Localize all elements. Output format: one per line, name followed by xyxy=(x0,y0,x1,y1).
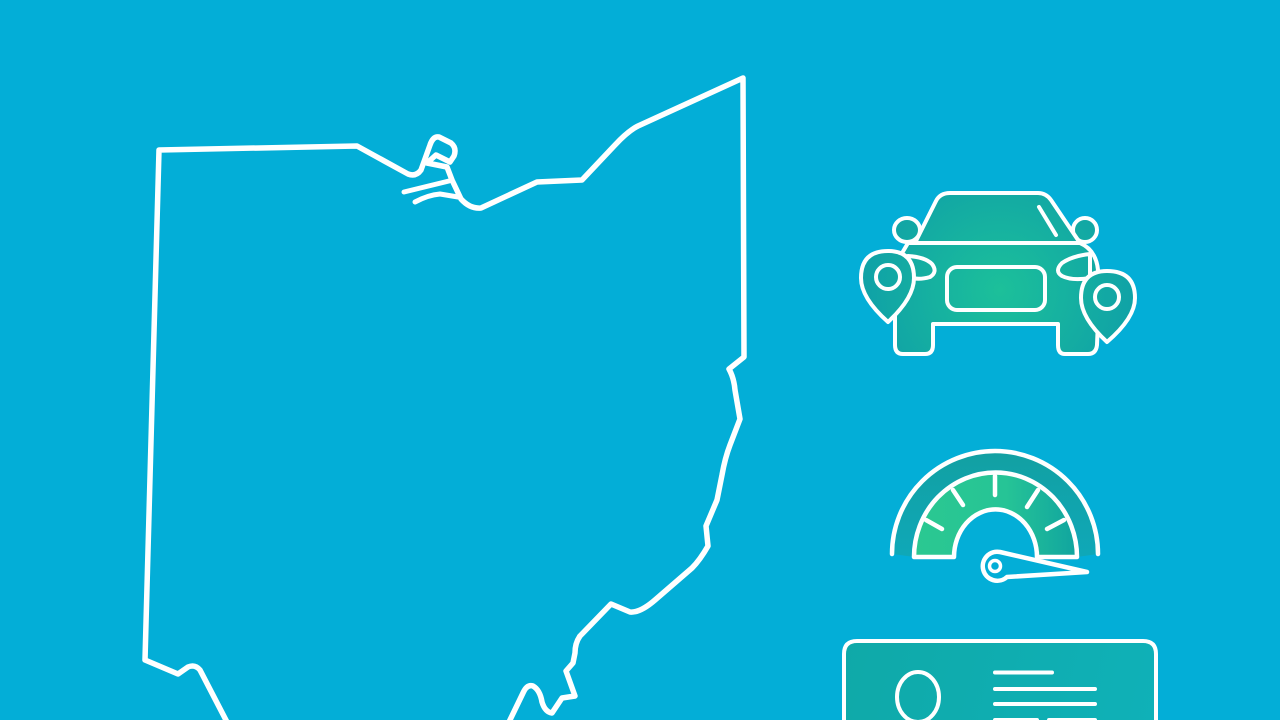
dial xyxy=(914,472,1077,557)
left mirror xyxy=(894,218,920,242)
icon: ID card xyxy=(844,641,1156,720)
ticks xyxy=(926,476,1064,529)
windshield xyxy=(915,193,1080,243)
needle xyxy=(983,552,1087,581)
photo oval xyxy=(897,672,939,720)
right headlight xyxy=(1058,254,1090,279)
outer band xyxy=(892,451,1098,557)
icon: speedometer gauge xyxy=(892,451,1098,581)
outer arc xyxy=(892,451,1098,554)
car body xyxy=(895,243,1098,354)
wiper highlight xyxy=(1039,207,1056,235)
card panel xyxy=(844,641,1156,720)
map: Ohio outline xyxy=(145,78,744,720)
icon: car with location pins xyxy=(861,193,1135,354)
left pin xyxy=(861,251,914,322)
text lines xyxy=(995,672,1095,720)
left headlight xyxy=(908,256,935,279)
right mirror xyxy=(1073,218,1097,242)
right pin xyxy=(1081,271,1135,342)
license plate xyxy=(947,267,1045,310)
